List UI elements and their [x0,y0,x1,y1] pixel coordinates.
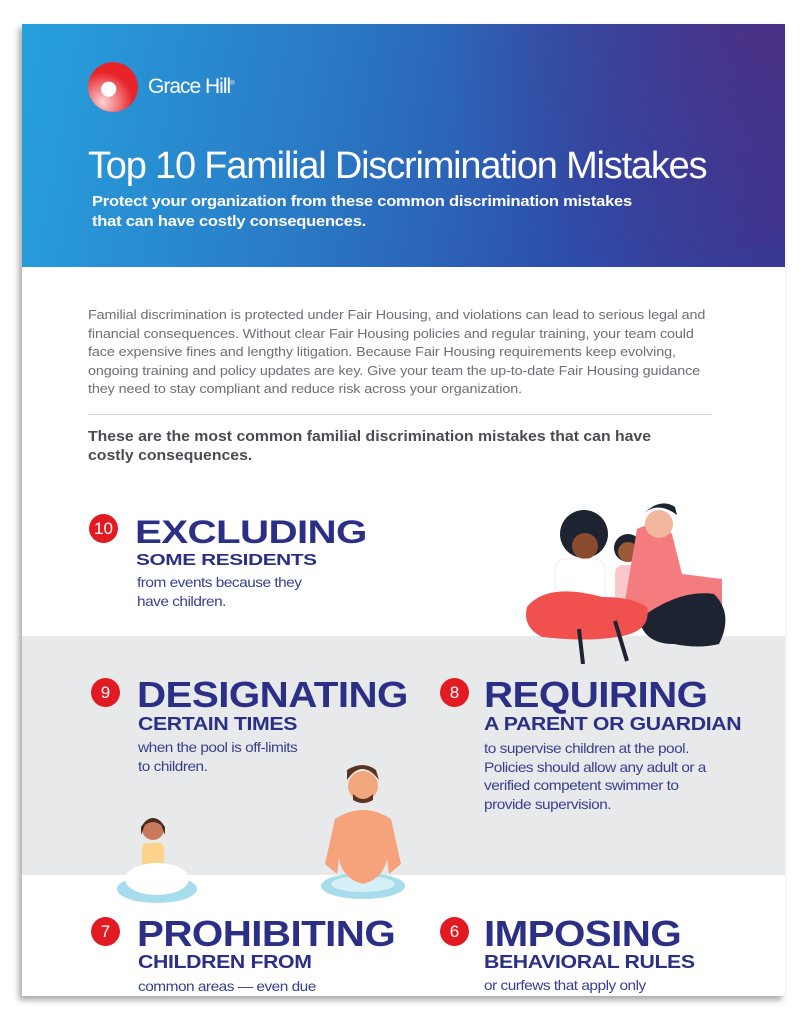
item 6: 6 [450,922,459,941]
item 7: common areas — even due [138,978,316,994]
intro paragraph: financial consequences. Without clear Fair Housing policies and regular training, your team could [88,326,694,341]
subtitle: Protect your organization from these common discrimination mistakes [92,193,632,210]
item 7: PROHIBITING [137,913,395,954]
item 8 [440,674,741,812]
item 8: 8 [450,683,459,702]
subtitle: that can have costly consequences. [92,213,366,230]
logo text: Grace Hill® [148,75,234,98]
item 6: or curfews that apply only [484,977,646,993]
item 7: 7 [101,922,110,941]
item 9: 9 [101,683,110,702]
lead-in heading: These are the most common familial discrimination mistakes that can have [88,429,651,445]
logo [88,62,235,112]
lead-in heading: costly consequences. [88,448,252,464]
item 8: Policies should allow any adult or a [484,758,706,774]
item 10: have children. [137,592,226,608]
illustration: child in float [117,818,197,903]
intro paragraph: Familial discrimination is protected under Fair Housing, and violations can lead to serious legal and [88,307,705,322]
illustration: family sitting [526,503,726,664]
intro paragraph [88,307,705,396]
item 9: to children. [138,758,207,774]
item 10 [89,514,367,608]
lead-in heading [88,429,651,464]
item 6: BEHAVIORAL RULES [484,952,695,972]
item 8: A PARENT OR GUARDIAN [484,714,741,734]
item 8: to supervise children at the pool. [484,740,689,756]
gray band [22,636,785,875]
item 7 [91,913,395,994]
intro paragraph: ongoing training and policy updates are key. Give your team the up-to-date Fair Housing guidance [88,363,700,378]
item 8: verified competent swimmer to [484,777,678,793]
icon: logo mark [88,62,138,112]
header banner [22,24,785,267]
item 9: DESIGNATING [137,674,408,715]
item 9: CERTAIN TIMES [138,714,297,734]
item 6: IMPOSING [484,913,681,954]
title: Top 10 Familial Discrimination Mistakes [88,145,706,187]
item 9: when the pool is off-limits [138,739,297,755]
item 8: provide supervision. [484,796,611,812]
intro paragraph: they need to stay compliant and reduce risk across your organization. [88,381,522,396]
intro paragraph: face expensive fines and lengthy litigation. Because Fair Housing requirements keep evolving, [88,344,676,359]
item 10: EXCLUDING [135,514,367,550]
item 10: SOME RESIDENTS [136,552,317,569]
item 8: REQUIRING [484,674,707,715]
item 7: CHILDREN FROM [138,952,312,972]
item 9 [91,674,408,774]
item 6 [440,913,695,993]
illustration: man in pool [321,765,405,899]
subtitle [92,193,632,230]
item 10: from events because they [137,574,301,590]
item 10: 10 [94,519,113,538]
